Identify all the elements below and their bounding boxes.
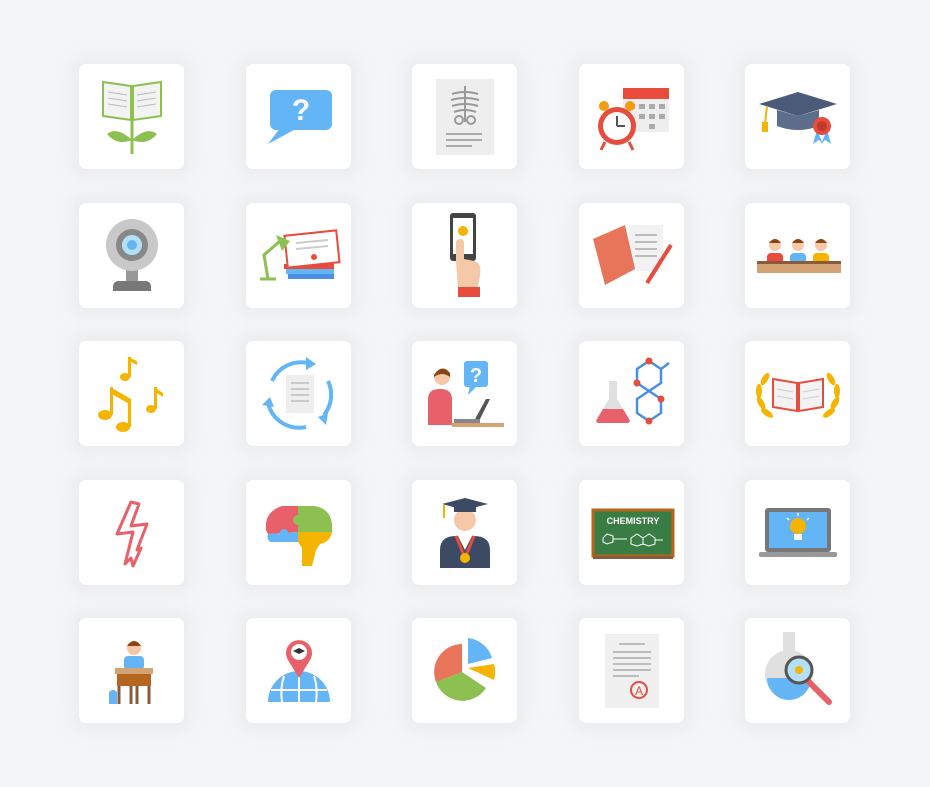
card: brain puzzle (245, 479, 352, 586)
icon: notebook and pencil (593, 225, 671, 285)
icon: brain puzzle (266, 506, 332, 566)
card: three students (744, 202, 851, 309)
icon: student at desk (109, 641, 153, 704)
card: globe pin (245, 617, 352, 724)
card: webcam (78, 202, 185, 309)
card: graduate (411, 479, 518, 586)
icon: book with sprout (103, 82, 161, 154)
icon: students at desk (757, 239, 841, 273)
icon: chalkboard: CHEMISTRY (607, 516, 659, 526)
icon: flask and molecule (596, 358, 669, 424)
icon: graduate person (440, 498, 490, 568)
icon: flask with magnifier (765, 632, 829, 702)
icon: lightning bolt (117, 502, 147, 566)
card: lamp and books (245, 202, 352, 309)
icon: webcam (106, 219, 158, 291)
icon: book with laurels (755, 371, 841, 419)
card: flask magnifier (744, 617, 851, 724)
card: student at desk (78, 617, 185, 724)
card: book laurel (744, 340, 851, 447)
icon: music notes (98, 357, 163, 432)
icon: globe with location pin (268, 640, 330, 702)
card: book plant (78, 63, 185, 170)
card: flask molecule (578, 340, 685, 447)
card: graduation cap (744, 63, 851, 170)
icon: clock and calendar (598, 88, 669, 150)
icon: person at laptop with question: ? (470, 365, 482, 387)
card: x-ray (411, 63, 518, 170)
card: chemistry board (578, 479, 685, 586)
icon: mortarboard (759, 92, 837, 144)
icon: x-ray document (436, 79, 494, 155)
icon: refresh document (262, 357, 331, 428)
card: person laptop question (411, 340, 518, 447)
icon: exam paper with A: A (635, 684, 643, 698)
card: phone idea (411, 202, 518, 309)
icon: pie chart (434, 638, 495, 701)
card: laptop idea (744, 479, 851, 586)
icon: phone with hand (450, 213, 480, 297)
card: question bubble (245, 63, 352, 170)
icon: speech bubble: ? (292, 94, 310, 127)
card: lightning (78, 479, 185, 586)
icon: desk lamp and certificate (260, 230, 340, 279)
icon: laptop with bulb (759, 508, 837, 557)
card: alarm calendar (578, 63, 685, 170)
card: music notes (78, 340, 185, 447)
card: graded paper (578, 617, 685, 724)
card: notebook pencil (578, 202, 685, 309)
card: document cycle (245, 340, 352, 447)
card: pie chart (411, 617, 518, 724)
